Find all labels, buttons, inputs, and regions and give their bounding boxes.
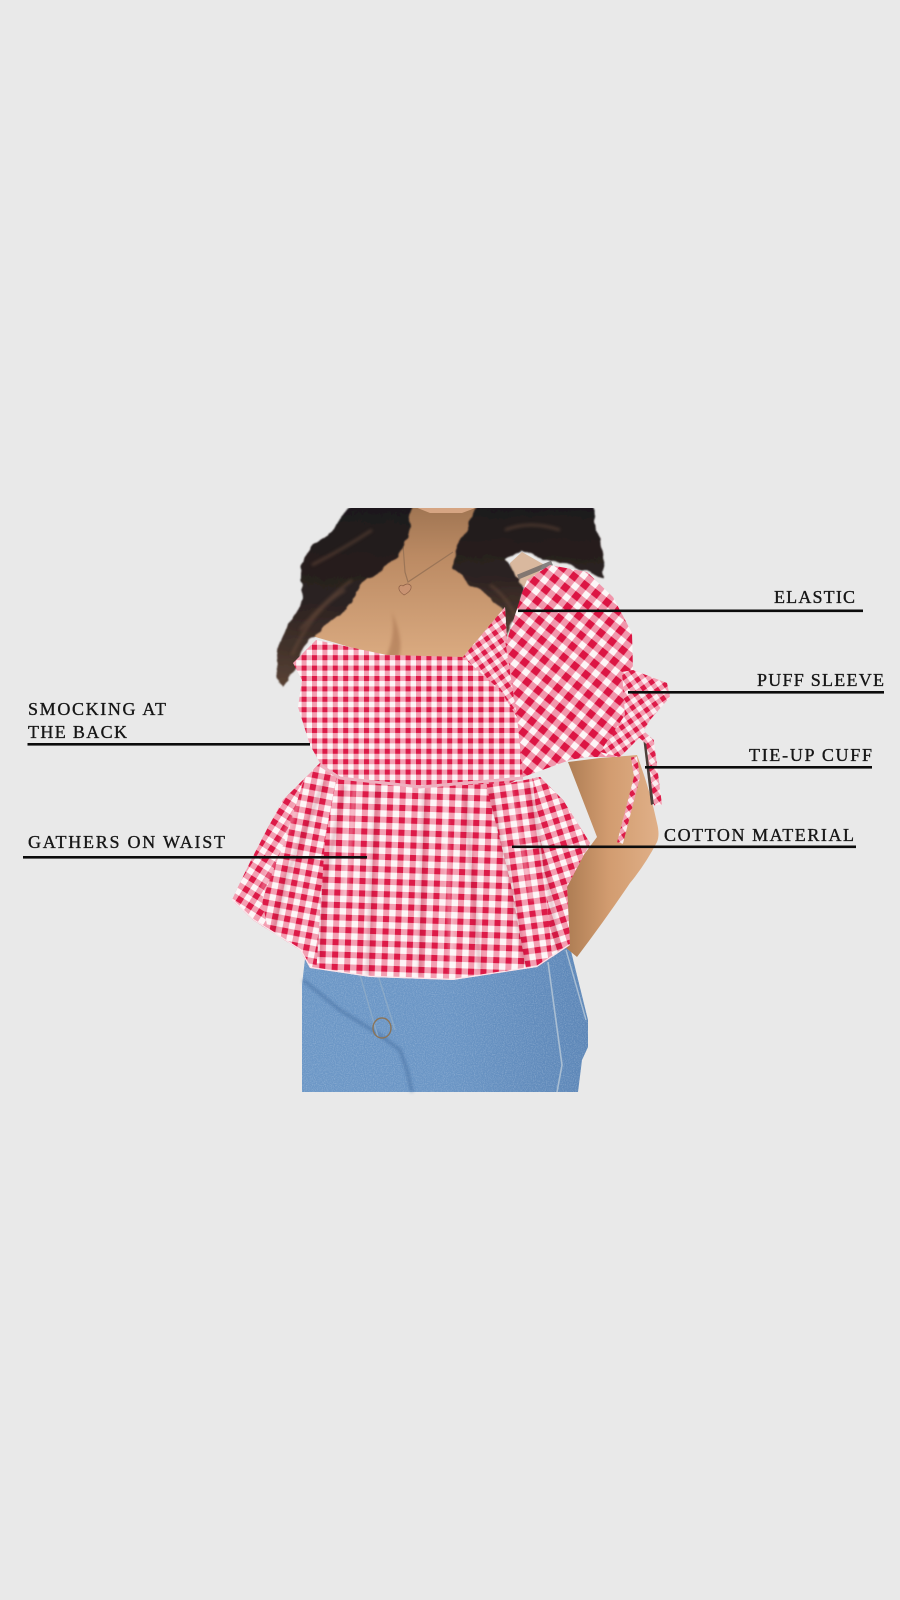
skin: neck and chest <box>313 508 504 657</box>
chest shading <box>386 618 402 656</box>
bodice <box>293 607 523 787</box>
callout: smocking at the back: SMOCKING AT <box>28 699 166 719</box>
hair: right <box>453 500 604 640</box>
necklace <box>399 545 453 595</box>
sleeve <box>505 565 670 777</box>
callout: cotton material: COTTON MATERIAL <box>664 825 854 845</box>
callout: tie-up cuff: TIE-UP CUFF <box>749 745 872 765</box>
callout: puff sleeve: PUFF SLEEVE <box>757 670 884 690</box>
callout: elastic: ELASTIC <box>774 587 855 607</box>
elastic strand <box>518 563 552 577</box>
callout: smocking at the back: THE BACK <box>28 722 127 742</box>
peplum skirt <box>232 763 590 980</box>
arm <box>560 755 658 957</box>
cuff tie: outer string <box>640 733 658 805</box>
jeans <box>302 947 588 1092</box>
callout: gathers on waist: GATHERS ON WAIST <box>28 832 225 852</box>
cuff tie: inner string <box>620 757 637 843</box>
callout: smocking at the back <box>28 699 310 746</box>
shoulder skin <box>510 552 543 590</box>
model photo illustration <box>225 500 670 1092</box>
dark tie shadow <box>644 737 654 805</box>
chin <box>418 508 475 513</box>
hair: left <box>278 500 415 690</box>
hair highlights <box>292 525 560 655</box>
